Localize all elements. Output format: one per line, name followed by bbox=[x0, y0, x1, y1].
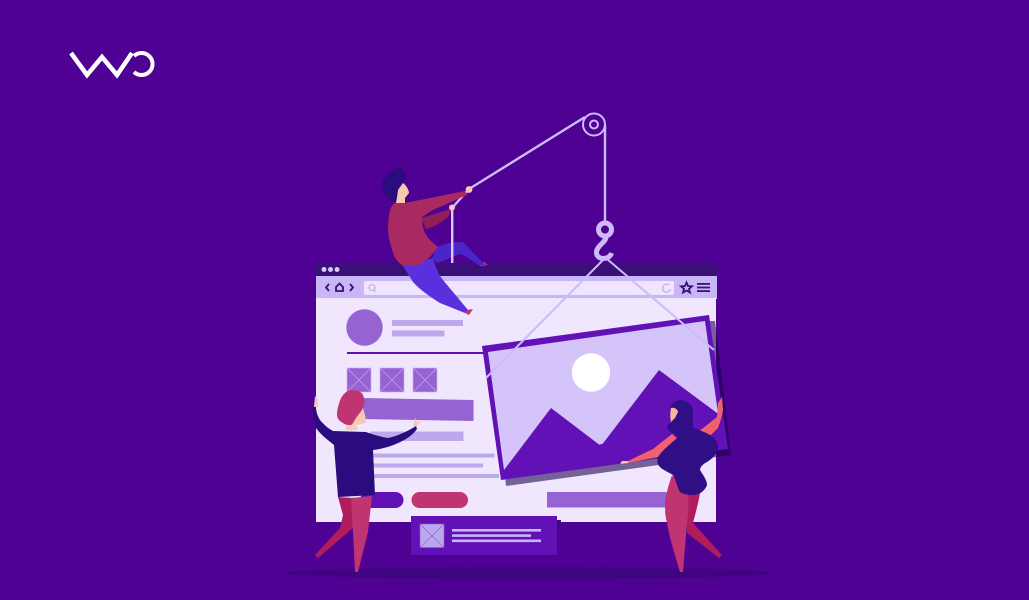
star icon bbox=[681, 282, 692, 292]
reload icon bbox=[663, 284, 670, 292]
hair bbox=[337, 390, 364, 425]
card lines bbox=[452, 529, 541, 542]
neck and face bbox=[346, 408, 366, 430]
sun bbox=[572, 353, 610, 392]
front shoe bbox=[465, 309, 473, 315]
card thumbnail bbox=[420, 524, 444, 548]
back arm bbox=[421, 209, 451, 229]
front leg bbox=[665, 475, 688, 572]
text bars bbox=[362, 398, 499, 478]
hands bbox=[314, 396, 318, 407]
left leg bbox=[315, 497, 353, 558]
back arm bbox=[698, 397, 723, 438]
hook and slings bbox=[486, 223, 714, 378]
front arm bbox=[622, 434, 680, 463]
hands bbox=[466, 186, 472, 193]
hair bbox=[657, 400, 718, 495]
divider bbox=[347, 352, 487, 354]
hair bbox=[382, 168, 406, 202]
right leg bbox=[351, 496, 372, 572]
back shoe bbox=[478, 262, 488, 266]
neck and face bbox=[396, 183, 409, 203]
torso and front arm bbox=[388, 191, 467, 266]
avatar bbox=[346, 309, 383, 346]
back leg bbox=[432, 242, 485, 265]
profile block bbox=[346, 309, 487, 354]
profile lines bbox=[392, 320, 463, 326]
bottom card bbox=[411, 516, 561, 555]
picture frame shadow bbox=[505, 321, 731, 486]
front hand bbox=[620, 461, 628, 464]
pulley and rope bbox=[452, 114, 605, 222]
shirt bbox=[313, 407, 417, 497]
browser toolbar bbox=[316, 276, 717, 299]
front leg bbox=[403, 258, 468, 313]
picture sky bbox=[488, 321, 718, 470]
person pulling rope bbox=[382, 168, 488, 315]
mountains bbox=[504, 370, 722, 474]
thumbnails row bbox=[347, 368, 437, 392]
navigation icons bbox=[326, 284, 353, 291]
browser title bar bbox=[316, 263, 717, 277]
menu icon bbox=[697, 283, 710, 292]
search icon bbox=[369, 284, 376, 292]
person on right bbox=[620, 397, 723, 572]
person on left bbox=[313, 390, 422, 572]
hook bbox=[598, 223, 612, 236]
face bbox=[670, 408, 678, 422]
hanging rope bbox=[451, 208, 453, 263]
buttons bbox=[360, 492, 672, 508]
back leg bbox=[686, 493, 722, 558]
picture frame bbox=[482, 315, 728, 480]
pull rope bbox=[452, 117, 585, 208]
ground shadow bbox=[287, 567, 773, 579]
browser window bbox=[316, 263, 717, 522]
vertical cable bbox=[604, 125, 606, 222]
pulley wheel bbox=[583, 114, 605, 136]
window dots bbox=[322, 267, 340, 272]
page content background bbox=[316, 298, 716, 522]
address bar bbox=[364, 281, 674, 295]
logo: VWO bbox=[71, 53, 153, 75]
